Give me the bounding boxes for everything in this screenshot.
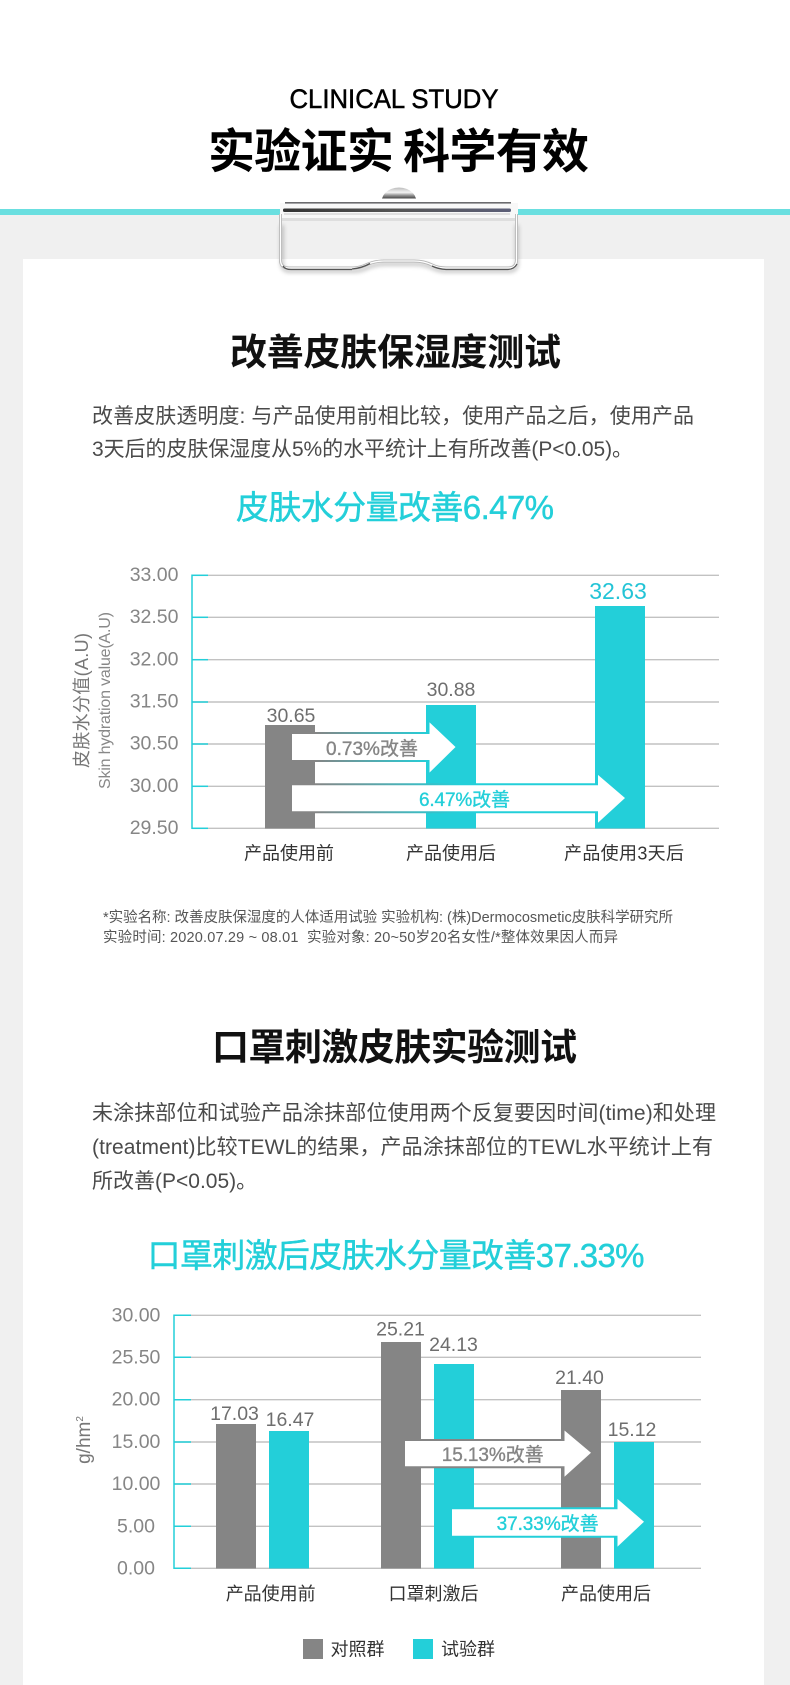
text block: hydration description [92, 405, 694, 461]
legend: 对照群 [330, 1640, 384, 1660]
text block: mask irritation description: 所改善(P<0.05)。 [92, 1170, 257, 1193]
teal headline: 6.47%: 皮肤水分量改善6.47% [236, 489, 554, 526]
bar chart: mask irritation [74, 1304, 701, 1660]
text block: mask irritation description [92, 1102, 716, 1193]
section heading: skin hydration test: 改善皮肤保湿度测试 [230, 322, 561, 376]
y axis title [72, 612, 114, 789]
y axis labels: 0.00 [117, 1558, 155, 1580]
y axis labels: 15.00 [112, 1431, 161, 1453]
arrow: 15.13% improvement [404, 1428, 592, 1479]
y axis labels: 32.50 [130, 606, 179, 628]
text block: hydration description: 改善皮肤透明度: 与产品使用前相比较，使用产品之后，使用产品 [92, 405, 694, 428]
legend [303, 1639, 495, 1660]
arrow: 0.73% improvement [291, 720, 457, 775]
footnote: 实验时间: 2020.07.29 ~ 08.01 实验对象: 20~50岁20名女性/*整体效果因人而异 [103, 928, 618, 946]
value labels: 24.13 [429, 1334, 478, 1356]
arrow: 37.33% improvement: 37.33%改善 [497, 1513, 599, 1535]
y axis labels [130, 564, 179, 839]
y axis title: Skin hydration value(A.U) [97, 612, 114, 789]
value labels: 30.65 [267, 705, 316, 727]
y axis unit: g/hm [74, 1422, 95, 1464]
x axis labels: 产品使用前 [226, 1584, 316, 1604]
icon: metal clipboard clip [280, 188, 518, 271]
arrow: 6.47% improvement: 6.47%改善 [419, 789, 510, 811]
arrow: 15.13% improvement: 15.13%改善 [442, 1444, 544, 1466]
value labels: 17.03 [210, 1403, 259, 1425]
teal headline: 37.33%: 口罩刺激后皮肤水分量改善37.33% [148, 1237, 644, 1274]
value labels: 25.21 [376, 1318, 425, 1340]
bars [216, 1424, 256, 1568]
x axis labels: 产品使用前 [244, 844, 334, 864]
arrow: 0.73% improvement: 0.73%改善 [326, 738, 418, 760]
bar chart: skin hydration [72, 564, 719, 864]
y axis labels: 32.00 [130, 648, 179, 670]
bars [265, 725, 315, 828]
y axis labels: 30.50 [130, 732, 179, 754]
value labels: 15.12 [608, 1419, 656, 1441]
value labels: 30.88 [427, 679, 475, 701]
title block: CLINICAL STUDY [290, 84, 498, 114]
y axis labels: 29.50 [130, 817, 179, 839]
value labels: 21.40 [555, 1367, 604, 1389]
x axis labels: 产品使用3天后 [564, 844, 684, 864]
value labels: 16.47 [266, 1409, 314, 1431]
y axis labels [112, 1304, 161, 1580]
y axis unit: 2 [75, 1416, 86, 1422]
footnote: *实验名称: 改善皮肤保湿度的人体适用试验 实验机构: (株)Dermocosmetic皮肤科学研究所 [103, 909, 673, 926]
x axis labels [226, 1584, 651, 1604]
footnote [103, 909, 673, 946]
y axis labels: 30.00 [130, 775, 179, 797]
y axis labels: 25.50 [112, 1346, 161, 1368]
value labels: 32.63 [589, 578, 647, 604]
legend: 试验群 [441, 1640, 495, 1660]
text block: mask irritation description: 未涂抹部位和试验产品涂抹部位使用两个反复要因时间(time)和处理 [92, 1102, 716, 1125]
y axis labels: 31.50 [130, 690, 179, 712]
section heading: mask irritation test: 口罩刺激皮肤实验测试 [212, 1017, 577, 1071]
text block: mask irritation description: (treatment)比较TEWL的结果，产品涂抹部位的TEWL水平统计上有 [92, 1136, 713, 1159]
arrow: 6.47% improvement [291, 773, 626, 825]
arrow: 37.33% improvement [451, 1497, 646, 1549]
y axis labels: 30.00 [112, 1304, 161, 1326]
y axis labels: 10.00 [112, 1473, 161, 1495]
x axis labels: 产品使用后 [561, 1584, 651, 1604]
title block: 实验证实 科学有效 [208, 113, 589, 182]
text block: hydration description: 3天后的皮肤保湿度从5%的水平统计上有所改善(P<0.05)。 [92, 438, 633, 461]
y axis labels: 20.00 [112, 1388, 161, 1410]
y axis labels: 5.00 [117, 1516, 155, 1538]
accent band [0, 209, 790, 215]
white card panel [23, 259, 764, 1685]
value labels [210, 1318, 656, 1441]
y axis labels: 33.00 [130, 564, 179, 586]
x axis labels [244, 844, 684, 864]
value labels [267, 578, 647, 727]
x axis labels: 口罩刺激后 [388, 1584, 478, 1604]
x axis labels: 产品使用后 [406, 844, 496, 864]
y axis title: 皮肤水分值(A.U) [72, 633, 92, 768]
